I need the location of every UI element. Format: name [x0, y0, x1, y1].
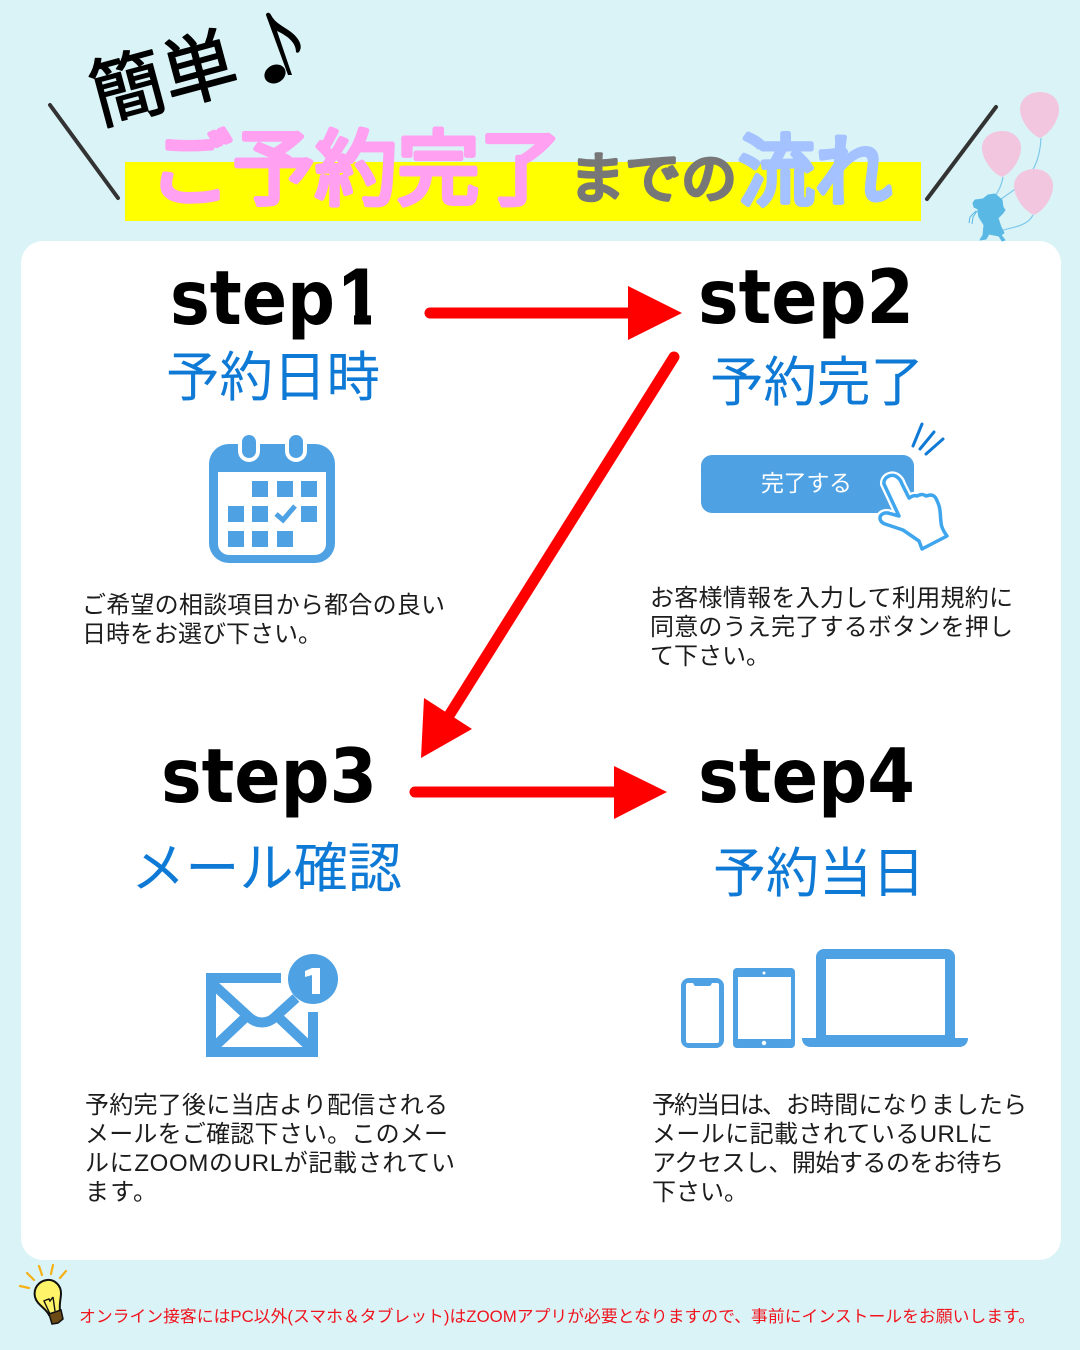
icon: pointing hand: [880, 424, 947, 549]
heading: までの: までの: [569, 134, 737, 214]
title block: [50, 1, 996, 222]
arrow: step1 to step2: [430, 286, 682, 340]
heading: step4: step4: [698, 732, 915, 820]
yellow title band: [125, 162, 921, 221]
description: step 4: 下さい。: [652, 1179, 748, 1206]
white content panel: [21, 241, 1061, 1260]
description: step 1: ご希望の相談項目から都合の良い: [82, 592, 445, 619]
right slash: [927, 107, 996, 199]
arrow: step2 to step3: [421, 357, 674, 758]
description: step 4: 予約当日は、: [652, 1092, 786, 1119]
description: step 4: お時間になりましたら: [786, 1092, 1027, 1119]
description: step 3: ルにZOOMのURLが記載されてい: [85, 1150, 455, 1177]
step 1: [82, 252, 445, 648]
heading: step3: step3: [161, 732, 377, 820]
description: step 2: 同意のうえ完了するボタンを押し: [650, 614, 1013, 641]
heading: 簡単: 簡単: [76, 1, 248, 145]
description: step 1: 日時をお選び下さい。: [82, 621, 322, 648]
subheading: 予約完了: 予約完了: [710, 353, 924, 413]
description: step 3: ます。: [85, 1179, 157, 1206]
description: step 3: 予約完了後に当店より配信される: [85, 1092, 448, 1119]
step 2: [650, 253, 1013, 670]
balloon right: [1014, 169, 1053, 215]
heading: step2: step2: [698, 253, 914, 341]
description: step 2: お客様情報を入力して利用規約に: [650, 585, 1013, 612]
description: step 3: メールをご確認下さい。このメー: [85, 1121, 448, 1148]
subheading: メール確認: メール確認: [131, 839, 402, 899]
arrow: step3 to step4: [415, 766, 667, 819]
heading: ご予約完了: ご予約完了: [150, 103, 562, 222]
balloon strings: [986, 138, 1041, 231]
button: 完了する: 完了する: [761, 470, 852, 496]
icon: mail with badge: [211, 954, 338, 1052]
icon: phone, tablet and laptop: [681, 949, 968, 1048]
subheading: 予約当日: 予約当日: [713, 844, 925, 904]
icon: music note: [261, 13, 301, 87]
heading: 流れ: 流れ: [738, 110, 892, 222]
girl ribbon: [969, 211, 977, 224]
icon: light bulb: [20, 1265, 66, 1324]
heading: step1 numeral: 1: [337, 252, 382, 341]
icon: calendar: [209, 431, 335, 563]
step 3: [85, 732, 455, 1206]
description: step 4: アクセスし、開始するのをお待ち: [652, 1150, 1004, 1177]
left slash: [50, 105, 118, 198]
girl silhouette: [973, 194, 1005, 241]
heading: step1 word: step: [170, 254, 335, 342]
subheading: 予約日時: 予約日時: [166, 348, 380, 408]
footer note: オンライン接客にはPC以外(スマホ＆タブレット)はZOOMアプリが必要となりますので、事前にインストールをお願いします。: [79, 1306, 1035, 1326]
button: 完了する: [701, 455, 914, 513]
illustration: girl with balloons: [969, 92, 1059, 241]
description: step 4: メールに記載されているURLに: [652, 1121, 993, 1148]
balloon left: [982, 131, 1021, 177]
step 4: [652, 732, 1027, 1206]
balloon top: [1020, 92, 1059, 138]
description: step 2: て下さい。: [650, 643, 770, 670]
